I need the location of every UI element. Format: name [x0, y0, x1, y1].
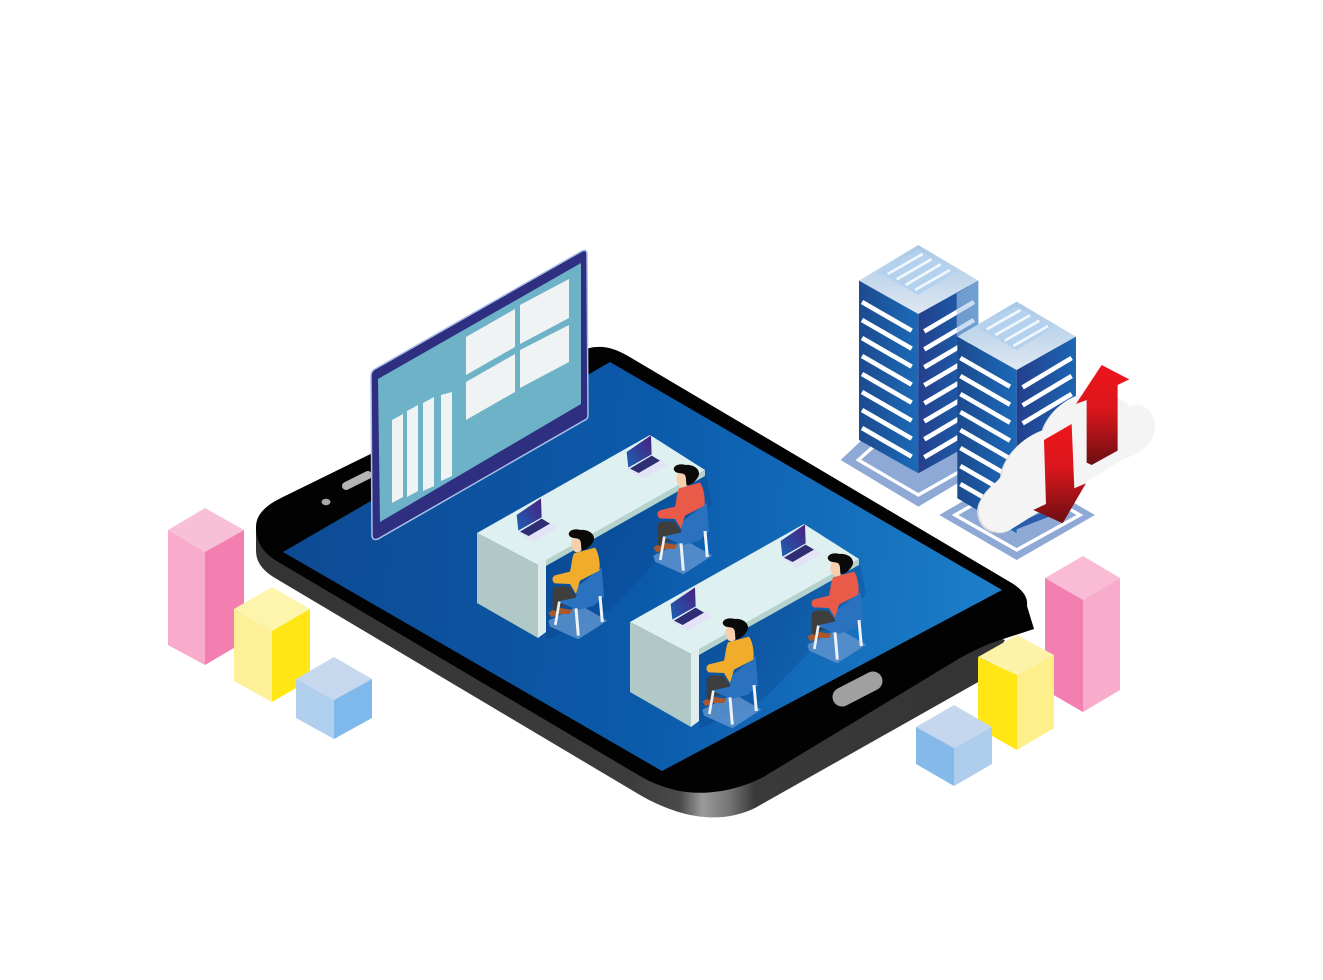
person yellow: [702, 618, 761, 728]
right bar group: [916, 556, 1120, 786]
left bar group: [168, 508, 372, 739]
base plate 1: [841, 387, 997, 507]
arrow shadow on plate: [1013, 513, 1053, 529]
pink bar left: [168, 508, 244, 665]
desk end: [538, 560, 546, 638]
home button: [842, 681, 873, 697]
laptop 1: [517, 498, 558, 542]
blue cube right: [916, 705, 992, 786]
under-desk shadow: [546, 470, 712, 640]
monitor display: [378, 263, 581, 522]
laptop 1: [671, 587, 712, 631]
person yellow: [548, 529, 607, 639]
cloud with arrows: [977, 365, 1155, 533]
desk front edge: [546, 470, 705, 566]
floating monitor: [371, 250, 588, 539]
cloud: [979, 393, 1155, 532]
data center: [841, 245, 1155, 560]
desk side: [477, 533, 538, 638]
monitor frame: [371, 250, 588, 539]
speaker: [346, 475, 368, 486]
arrow up: [1076, 365, 1129, 465]
desk top: [630, 524, 859, 654]
person red: [653, 464, 712, 574]
person red: [807, 553, 866, 663]
tablet screen: [283, 362, 1002, 771]
camera dot: [322, 499, 330, 505]
tablet: [256, 347, 1034, 817]
pink bar right: [1045, 556, 1120, 712]
server tower 1: [859, 245, 978, 473]
laptop 2: [627, 435, 668, 479]
cloud side: [977, 394, 1153, 533]
desk top: [477, 435, 705, 565]
under-desk shadow: [699, 559, 866, 729]
desk end: [691, 649, 699, 727]
desk group back: [477, 435, 712, 640]
bar chart: [392, 392, 452, 503]
yellow bar right: [978, 635, 1054, 750]
blue cube left: [296, 657, 372, 739]
base plate 2: [939, 470, 1095, 560]
desk side: [630, 622, 691, 727]
desk group front: [630, 524, 866, 729]
tablet face: [256, 347, 1034, 793]
desk front edge: [699, 559, 859, 655]
window panels: [466, 279, 569, 420]
tablet side edge: [256, 500, 1005, 817]
server tower 2: [957, 302, 1076, 533]
yellow bar left: [234, 587, 310, 702]
laptop 2: [781, 524, 822, 568]
arrow down: [1033, 424, 1086, 523]
